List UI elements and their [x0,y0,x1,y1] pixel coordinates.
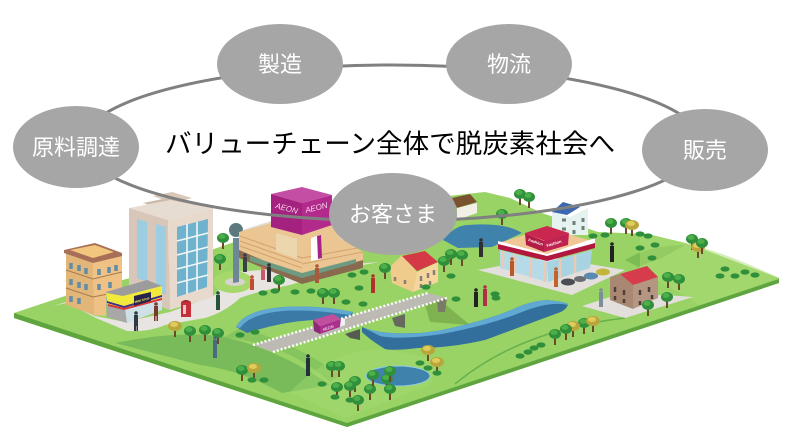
parked cars [561,268,610,286]
upper pond [443,224,522,248]
building: brown roof house [452,194,477,220]
node: manufacturing [217,24,343,104]
truck: AEON [321,324,334,332]
building: fashion store: Fashion [528,237,544,247]
node: raw material procurement: 原料調達 [32,135,120,160]
building: convenience store: MINI STOP [134,296,150,304]
pavement: plazas and paths [53,257,693,331]
node: logistics [446,24,572,104]
lower pond [366,366,430,386]
monument pole [213,223,253,293]
node: customers [329,173,457,255]
building: fashion store [498,226,595,282]
phone box [181,300,191,317]
hill shading [115,235,779,418]
building: brown house with red roof [610,266,658,309]
people [134,238,614,376]
AEON shopping mall: AEON [274,201,299,216]
node: customers: お客さま [349,202,437,227]
node: raw material procurement [13,106,139,188]
node: sales: 販売 [683,138,727,163]
bridge [253,293,447,352]
AEON shopping mall [239,187,363,284]
building: convenience store [106,280,162,323]
river [236,300,568,350]
ground plate [14,192,779,427]
building: blue roof house [552,202,588,235]
truck [313,314,345,334]
node: sales [642,109,768,191]
trees and bushes [168,189,760,411]
node: manufacturing: 製造 [258,52,302,77]
title: バリューチェーン全体で脱炭素社会へ [165,129,615,159]
AEON shopping mall: AEON [303,201,329,215]
node: logistics: 物流 [487,52,531,77]
building: yellow house with red roof [390,251,438,292]
building: fashion store: Fashion [546,239,562,248]
value chain ring line [82,65,702,221]
building: apartment [64,243,122,316]
building: office tower [129,192,213,310]
